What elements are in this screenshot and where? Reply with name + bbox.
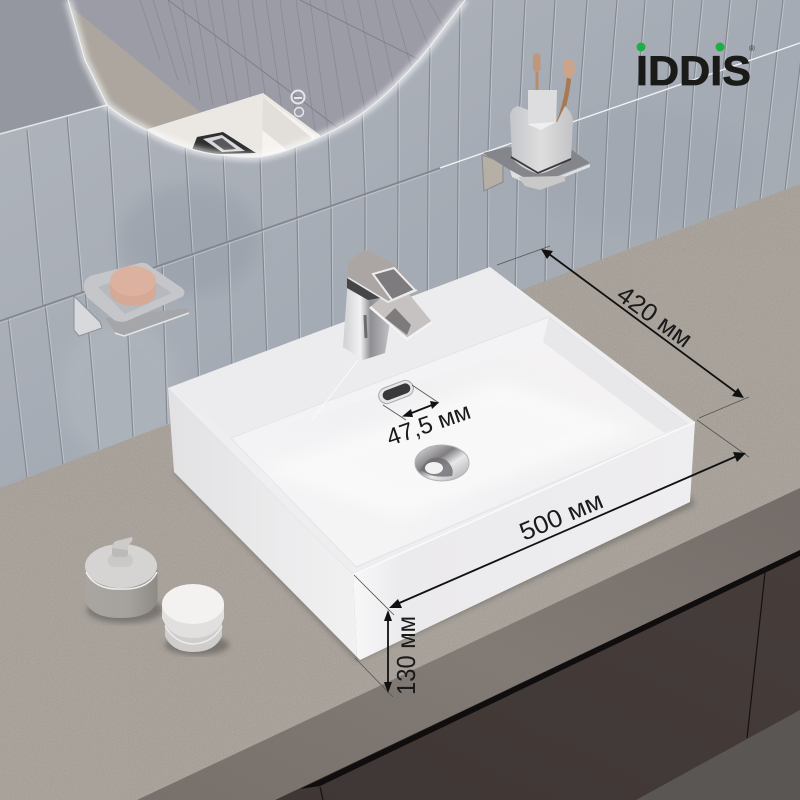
soap bar <box>110 266 156 306</box>
panel: round mirror with reflection <box>60 0 480 170</box>
top deck <box>168 267 695 575</box>
basin right wall <box>543 317 689 433</box>
left face <box>168 388 357 657</box>
logo: IDDIS: ® <box>749 44 755 53</box>
panel: countertop <box>0 180 800 800</box>
dimension: 420 mm: 420 мм <box>611 280 698 353</box>
icon: drain <box>415 445 469 481</box>
panel: white washbasin <box>168 267 695 660</box>
shadow: sink on counter <box>174 465 695 661</box>
icon: cream jar <box>162 584 229 655</box>
basin floor <box>231 342 664 566</box>
dimension: 130 mm: 130 мм <box>391 616 421 695</box>
mirror reflection: sink <box>148 93 320 157</box>
icon: soap dispenser <box>85 537 163 623</box>
panel: tiled wall <box>0 0 800 500</box>
icon: overflow hole <box>376 378 416 406</box>
floor <box>636 710 800 800</box>
dimension: 500 mm: 500 мм <box>515 486 607 547</box>
toothbrushes <box>533 53 575 126</box>
icon: toothbrush cup holder <box>482 53 590 191</box>
icon: soap dish <box>74 263 189 336</box>
mirror touch buttons <box>292 90 304 116</box>
mirror reflection: countertop <box>72 8 200 129</box>
logo: IDDIS: IDDIS <box>636 47 751 94</box>
mirror reflection: faucet <box>190 132 256 155</box>
front face <box>353 422 695 660</box>
dimension: 500 mm <box>354 420 749 697</box>
dimension: 420 mm <box>497 246 749 418</box>
dimension: 47,5 mm: 47,5 мм <box>383 398 474 452</box>
icon: faucet <box>343 250 432 360</box>
basin rim lines <box>231 317 689 567</box>
panel: cabinet <box>275 550 800 800</box>
